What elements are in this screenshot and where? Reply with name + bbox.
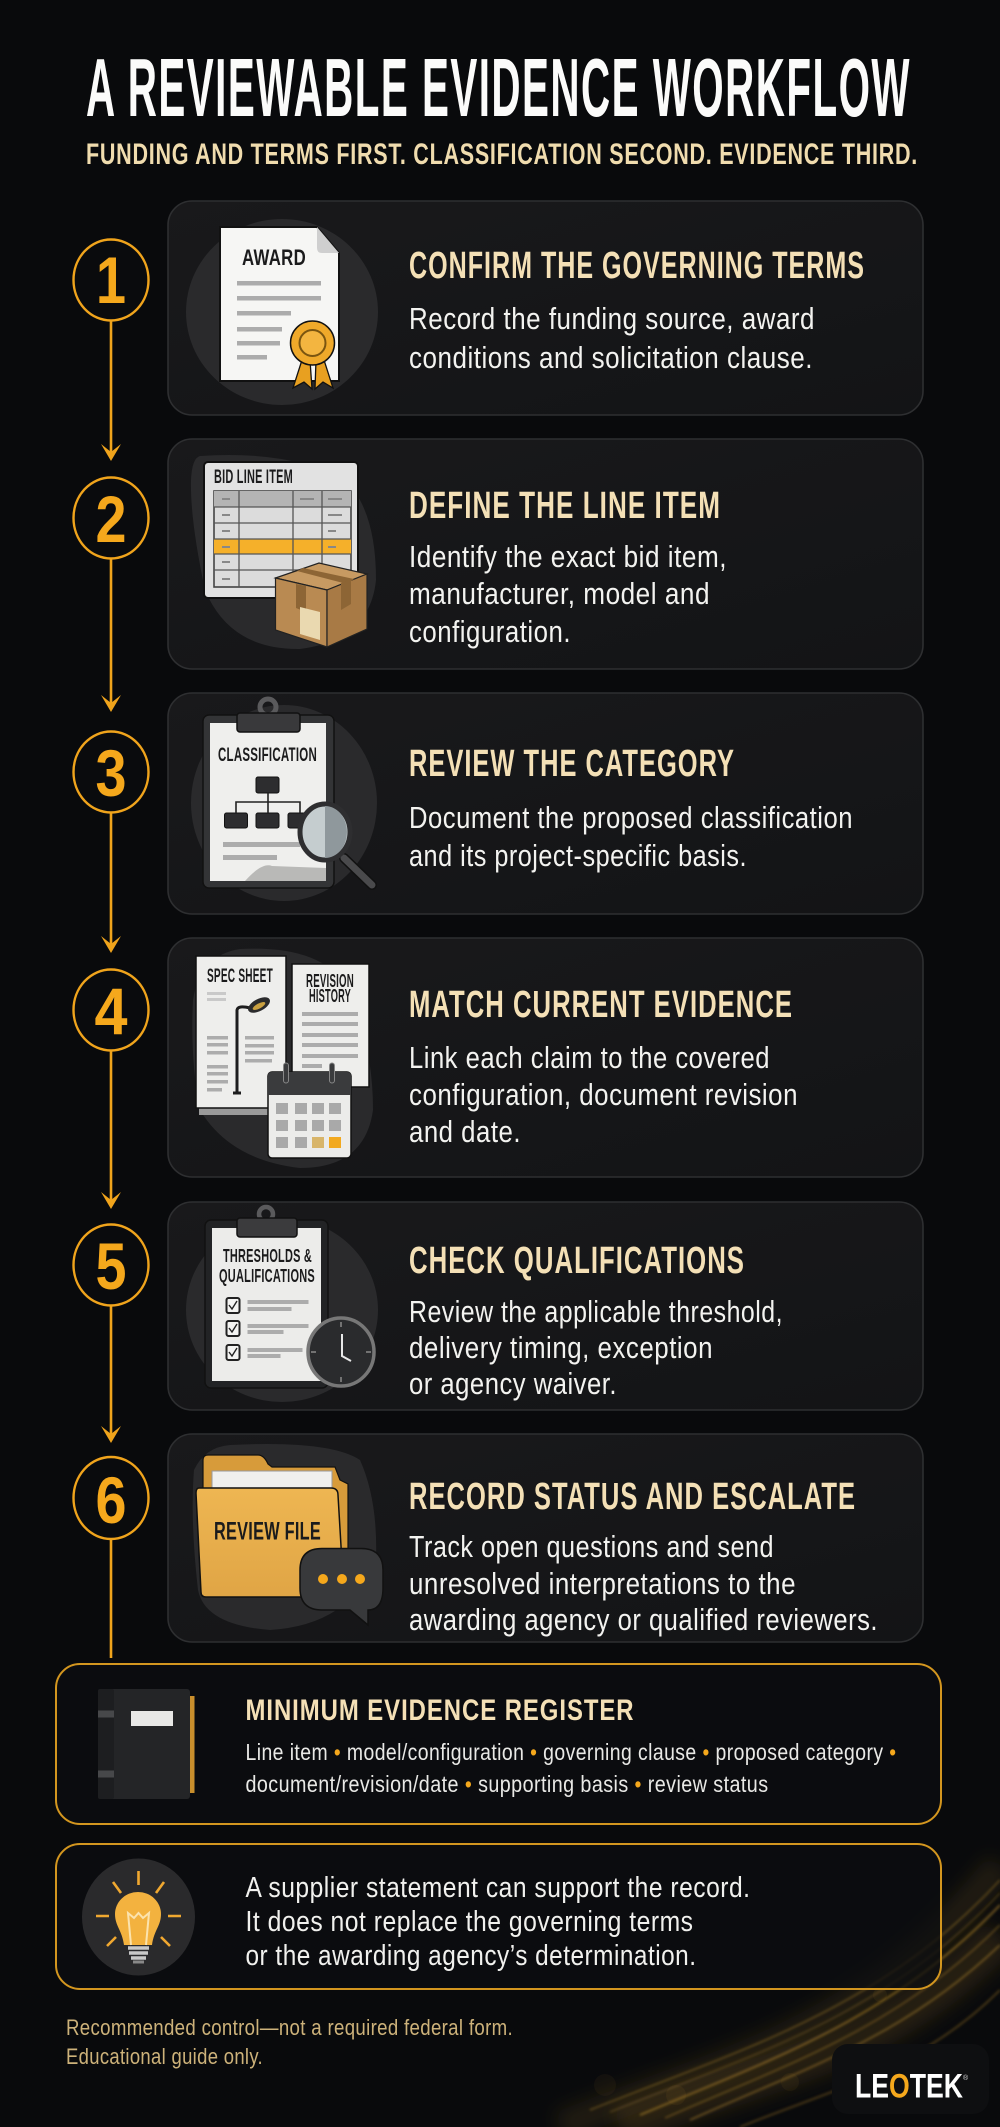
body text: conditions and solicitation clause.	[409, 341, 813, 375]
logo: LEOTEK: ®	[963, 2074, 969, 2082]
icon: review folder and speech bubble: REVIEW FILE	[214, 1518, 321, 1546]
step 6 number: 6	[96, 1463, 126, 1537]
body text: Identify the exact bid item,	[409, 540, 727, 574]
logo: LEOTEK	[832, 2044, 989, 2114]
icon: qualifications clipboard and clock: QUALIFICATIONS	[219, 1266, 315, 1286]
step 5 number: 5	[96, 1229, 126, 1303]
heading: MATCH CURRENT EVIDENCE	[409, 984, 793, 1026]
step 5 number	[74, 1224, 148, 1306]
note text: A supplier statement can support the record.	[246, 1872, 750, 1904]
body text: Document the proposed classification	[409, 801, 853, 835]
register fields: Line item • model/configuration • governing clause • proposed category •	[246, 1739, 896, 1765]
step 2 number	[74, 478, 148, 558]
icon: spec sheet, revision history, calendar	[192, 949, 373, 1168]
heading: REVIEW THE CATEGORY	[409, 743, 735, 785]
panel: step 2 define line item	[168, 439, 923, 669]
icon: spec sheet, revision history, calendar: REVISION	[306, 971, 354, 991]
step 1 number	[74, 240, 148, 320]
body text	[409, 1295, 783, 1401]
body text	[409, 801, 853, 873]
icon: bid sheet and box: BID LINE ITEM	[214, 467, 293, 488]
step 4 number: 4	[94, 974, 128, 1048]
register fields: document/revision/date • supporting basis • review status	[246, 1771, 768, 1797]
register fields	[246, 1739, 896, 1797]
body text	[409, 1041, 798, 1149]
icon: bid sheet and box	[191, 455, 376, 649]
note text: or the awarding agency’s determination.	[246, 1940, 696, 1972]
note text: It does not replace the governing terms	[246, 1906, 694, 1938]
body text	[409, 540, 727, 649]
body text: Track open questions and send	[409, 1530, 774, 1564]
step 6 number	[74, 1457, 148, 1539]
body text: or agency waiver.	[409, 1367, 617, 1401]
body text: Link each claim to the covered	[409, 1041, 770, 1075]
heading: MINIMUM EVIDENCE REGISTER	[246, 1694, 634, 1727]
footnote	[66, 2015, 513, 2069]
logo: LEOTEK: LEOTEK	[855, 2068, 963, 2106]
body text	[409, 302, 815, 375]
body text: manufacturer, model and	[409, 577, 710, 611]
icon: qualifications clipboard and clock	[186, 1207, 378, 1402]
panel: supplier statement note	[56, 1844, 941, 1989]
panel: step 3 review category	[168, 693, 923, 914]
body text	[409, 1530, 878, 1637]
icon: light bulb	[82, 1858, 195, 1976]
icon: review folder and speech bubble	[193, 1444, 383, 1630]
heading: DEFINE THE LINE ITEM	[409, 485, 721, 527]
icon: binder	[98, 1689, 194, 1799]
icon: spec sheet, revision history, calendar: SPEC SHEET	[207, 966, 273, 987]
body text: awarding agency or qualified reviewers.	[409, 1603, 878, 1637]
icon: award document: AWARD	[242, 245, 306, 270]
icon: classification clipboard	[191, 699, 377, 901]
body text: Review the applicable threshold,	[409, 1295, 783, 1329]
step 1 number: 1	[96, 243, 126, 317]
step 3 number	[74, 732, 148, 812]
icon: classification clipboard: CLASSIFICATION	[218, 745, 317, 766]
timeline connectors and arrows	[101, 321, 121, 1658]
step 4 number	[74, 970, 148, 1050]
step 3 number: 3	[96, 736, 126, 810]
icon: qualifications clipboard and clock: THRESHOLDS &	[223, 1246, 312, 1266]
panel: step 4 match evidence	[168, 938, 923, 1177]
background: gold light sweep	[560, 1865, 1000, 2127]
body text: and its project-specific basis.	[409, 839, 747, 873]
panel: minimum evidence register	[56, 1664, 941, 1824]
body text: unresolved interpretations to the	[409, 1567, 796, 1601]
footnote: Educational guide only.	[66, 2044, 263, 2069]
heading: CHECK QUALIFICATIONS	[409, 1240, 745, 1282]
panel: step 5 check qualifications	[168, 1202, 923, 1410]
body text: configuration.	[409, 615, 571, 649]
icon: spec sheet, revision history, calendar: HISTORY	[309, 986, 351, 1006]
step 2 number: 2	[96, 482, 126, 556]
icon: award document	[186, 219, 378, 405]
body text: configuration, document revision	[409, 1078, 798, 1112]
footnote: Recommended control—not a required federal form.	[66, 2015, 513, 2040]
note text	[246, 1872, 750, 1972]
panel: step 6 record status	[168, 1434, 923, 1642]
body text: Record the funding source, award	[409, 302, 815, 336]
panel: step 1 confirm terms	[168, 201, 923, 415]
body text: and date.	[409, 1115, 521, 1149]
body text: delivery timing, exception	[409, 1331, 713, 1365]
